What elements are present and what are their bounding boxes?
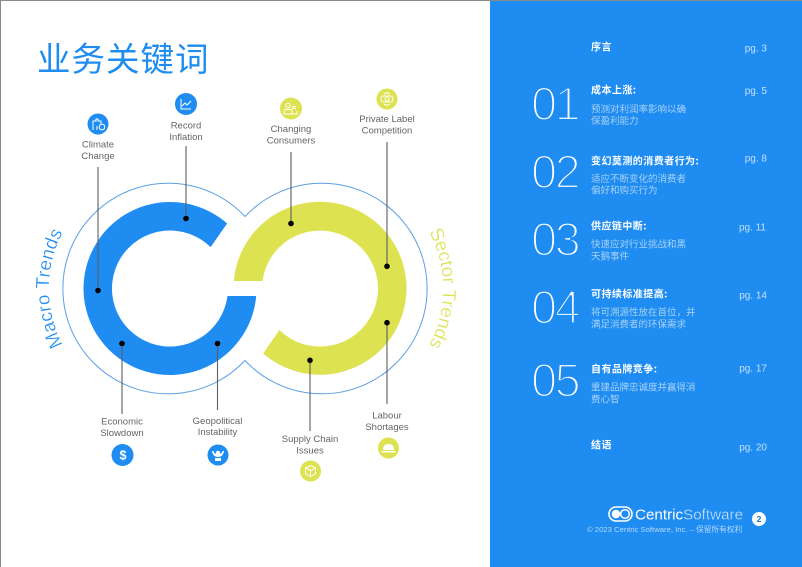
contents: section 03: 天鹅事件 [591, 248, 630, 262]
contents: section 03: 快速应对行业挑战和黑 [591, 236, 687, 250]
callout: Labour Shortages [365, 320, 409, 458]
callout: Economic Slowdown [100, 341, 144, 466]
contents: section 05: 05 [531, 354, 580, 406]
contents: preface: 序言 [591, 38, 612, 54]
callout: Record Inflation: Record [171, 120, 201, 132]
callout: Supply Chain Issues: Issues [296, 446, 324, 456]
curved label: Macro Trends: Macro Trends [36, 230, 62, 349]
callout: Record Inflation: Inflation [169, 132, 203, 143]
contents: section 04: 04 [531, 280, 580, 334]
contents: section 01 [531, 77, 767, 130]
contents: section 04 [531, 280, 767, 334]
logo: Centric Software: CentricSoftware [635, 506, 743, 524]
callout: Labour Shortages: Shortages [365, 422, 409, 433]
contents: preface [591, 38, 767, 54]
callout: Supply Chain Issues [282, 358, 338, 482]
contents: section 02: 02 [531, 145, 579, 198]
contents: section 03: 03 [531, 212, 580, 266]
icon: line chart [175, 93, 197, 115]
callout: Changing Consumers [267, 98, 316, 226]
callout: Private Label Competition [359, 88, 415, 269]
callout: Geopolitical Instability: Geopolitical [193, 416, 242, 427]
contents: section 02: pg. 8 [745, 154, 767, 164]
icon: hands and globe [208, 444, 228, 466]
callout: Climate Change: Climate [82, 140, 114, 150]
callout: Climate Change [81, 114, 115, 293]
page number badge [752, 512, 766, 526]
callout: Private Label Competition: Private Label [359, 114, 415, 125]
contents: section 02: 变幻莫测的消费者行为: [591, 152, 699, 168]
contents: section 04: 将可溯源性放在首位，并 [591, 304, 696, 318]
contents: section 05: pg. 17 [739, 364, 767, 374]
icon: climate [88, 114, 108, 134]
contents: section 02 [531, 145, 767, 198]
contents: section 04: pg. 14 [739, 290, 767, 302]
contents: section 05: 自有品牌竞争: [591, 360, 657, 376]
contents: section 02: 适应不断变化的消费者 [591, 171, 686, 185]
icon: dollar: $ [120, 448, 127, 462]
contents: section 01: 预测对利润率影响以确 [591, 102, 686, 116]
icon: hard hat [378, 438, 399, 458]
infinity diagram [36, 182, 456, 394]
icon: box [300, 460, 321, 482]
blue ring: macro trends [84, 202, 256, 375]
contents: conclusion: pg. 20 [739, 442, 767, 454]
yellow ring: sector trends [234, 202, 406, 375]
contents: section 01: pg. 5 [745, 86, 767, 97]
callout: Geopolitical Instability [193, 341, 242, 466]
callout: Changing Consumers: Consumers [267, 136, 316, 146]
contents: section 05: 费心智 [591, 392, 620, 406]
curved label: Sector Trends: Sector Trends [430, 228, 456, 348]
contents: section 05 [531, 354, 767, 406]
callout: Labour Shortages: Labour [372, 410, 402, 422]
contents: conclusion: 结语 [591, 436, 612, 452]
callout: Geopolitical Instability: Instability [198, 427, 238, 438]
contents: section 03 [531, 212, 766, 266]
copyright: © 2023 Centric Software, Inc. – 保留所有权利 [587, 524, 743, 534]
callout: Record Inflation [169, 93, 203, 221]
contents: section 02: 偏好和购买行为 [591, 182, 658, 196]
callout: Climate Change: Change [81, 151, 115, 162]
contents: section 03: pg. 11 [739, 222, 766, 234]
contents: section 04: 满足消费者的环保需求 [591, 316, 687, 330]
panel: contents sidebar [490, 1, 802, 567]
contents: preface: pg. 3 [745, 44, 767, 54]
contents: section 04: 可持续标准提高: [591, 286, 668, 300]
title: 业务关键词 [37, 32, 210, 81]
contents: section 05: 重建品牌忠诚度并赢得消 [591, 380, 696, 394]
callout: Economic Slowdown: Economic [101, 416, 143, 428]
callout: Private Label Competition: Competition [362, 126, 412, 136]
callout: Supply Chain Issues: Supply Chain [282, 434, 338, 445]
contents: conclusion [591, 436, 767, 454]
icon: price tag [376, 88, 398, 110]
icon: consumers [280, 98, 302, 120]
contents: section 01: 成本上涨: [591, 82, 636, 96]
callout: Changing Consumers: Changing [271, 124, 311, 135]
contents: section 01: 保盈利能力 [591, 113, 639, 127]
contents: section 01: 01 [531, 77, 579, 130]
callout: Economic Slowdown: Slowdown [100, 428, 144, 439]
infinity outline [63, 183, 427, 394]
page number badge: 2 [757, 514, 762, 524]
contents: section 03: 供应链中断: [591, 218, 647, 232]
